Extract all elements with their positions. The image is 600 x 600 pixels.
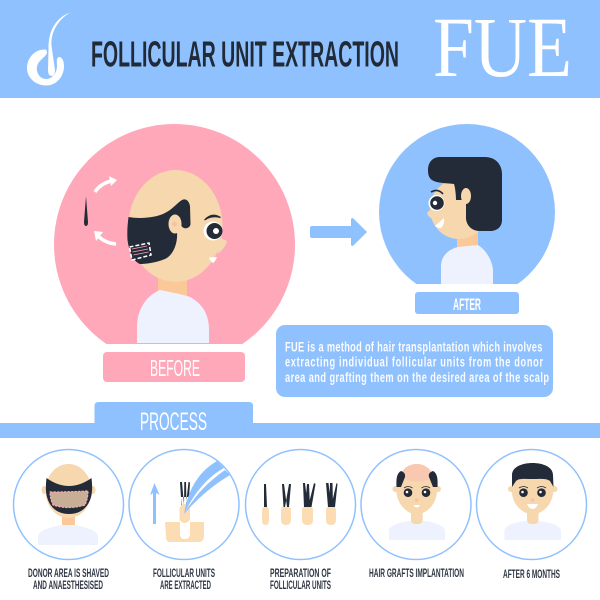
figure: balding man (127, 170, 227, 343)
label: step 3: FOLLICULAR UNITS (270, 578, 331, 592)
header band (0, 0, 600, 98)
head (42, 464, 96, 518)
arrow: before to after (310, 218, 367, 246)
panel: before (54, 124, 295, 365)
before label: BEFORE (150, 355, 200, 381)
icon: hair strand (84, 196, 88, 226)
face (404, 486, 430, 508)
face (519, 486, 546, 509)
neck (411, 505, 423, 524)
head (128, 170, 222, 282)
neck (527, 505, 538, 524)
ear (168, 214, 182, 234)
arrows: rotation (94, 176, 117, 244)
figure: man with hair (427, 157, 502, 284)
mouth (209, 257, 217, 263)
shirt (38, 525, 98, 545)
step 5: after 6 months (476, 450, 586, 560)
head (430, 179, 488, 239)
shirt (441, 245, 493, 284)
eye (428, 195, 444, 211)
panel: after (379, 124, 555, 300)
side hair (396, 471, 438, 487)
label: step 3 (270, 566, 331, 592)
smile (435, 218, 444, 228)
neck (457, 232, 478, 250)
step 4: implantation (361, 450, 471, 560)
unit 4 (326, 483, 338, 525)
hair band (46, 478, 92, 514)
label: step 2: FOLLICULAR UNITS (153, 566, 215, 580)
nose (427, 209, 437, 221)
head (508, 464, 558, 514)
after label: AFTER (453, 295, 481, 314)
label: step 1: DONOR AREA IS SHAVED (28, 566, 109, 580)
unit 1 (262, 484, 269, 525)
description text box (276, 325, 553, 397)
unit 2 (281, 484, 291, 525)
label: step 4: HAIR GRAFTS IMPLANTATION (369, 566, 464, 580)
tweezers (184, 461, 230, 514)
label: step 1 (28, 566, 109, 592)
nose (217, 238, 227, 254)
label: step 2 (153, 566, 215, 592)
icon: hair follicle (27, 12, 70, 86)
FUE heading: FUE (433, 0, 572, 95)
label: step 1: AND ANAESTHESISED (33, 578, 103, 592)
process band (0, 402, 600, 438)
pink circle (54, 124, 295, 365)
shirt (137, 290, 209, 343)
before label (103, 352, 245, 382)
step 1: donor area (14, 450, 124, 560)
description text box: FUE is a method of hair transplantation which involves (285, 339, 543, 355)
neck (62, 510, 75, 525)
description text box: extracting individual follicular units from the donor (285, 354, 543, 370)
step 2: extraction (129, 450, 239, 560)
process heading: PROCESS (140, 408, 207, 436)
donor area (130, 243, 151, 260)
eye (204, 222, 222, 240)
neck (158, 270, 187, 298)
blue circle (379, 124, 555, 300)
after label (415, 292, 519, 314)
donor patch (50, 491, 88, 508)
hair (428, 157, 502, 231)
follicle (180, 482, 190, 523)
hair (127, 199, 190, 264)
hair (512, 463, 554, 487)
eyebrow (431, 190, 443, 194)
head (392, 464, 441, 514)
shirt (504, 521, 561, 540)
step 3: follicular units (246, 450, 356, 560)
description text box: area and grafting them on the desired area of the scalp (285, 369, 549, 386)
label: step 2: ARE EXTRACTED (160, 578, 211, 592)
label: step 3: PREPARATION OF (270, 566, 331, 580)
shirt (389, 521, 445, 540)
eyebrow (204, 215, 220, 220)
arrow up (150, 483, 160, 524)
ear (461, 188, 471, 204)
skin section (165, 522, 204, 542)
unit 3 (302, 483, 316, 525)
